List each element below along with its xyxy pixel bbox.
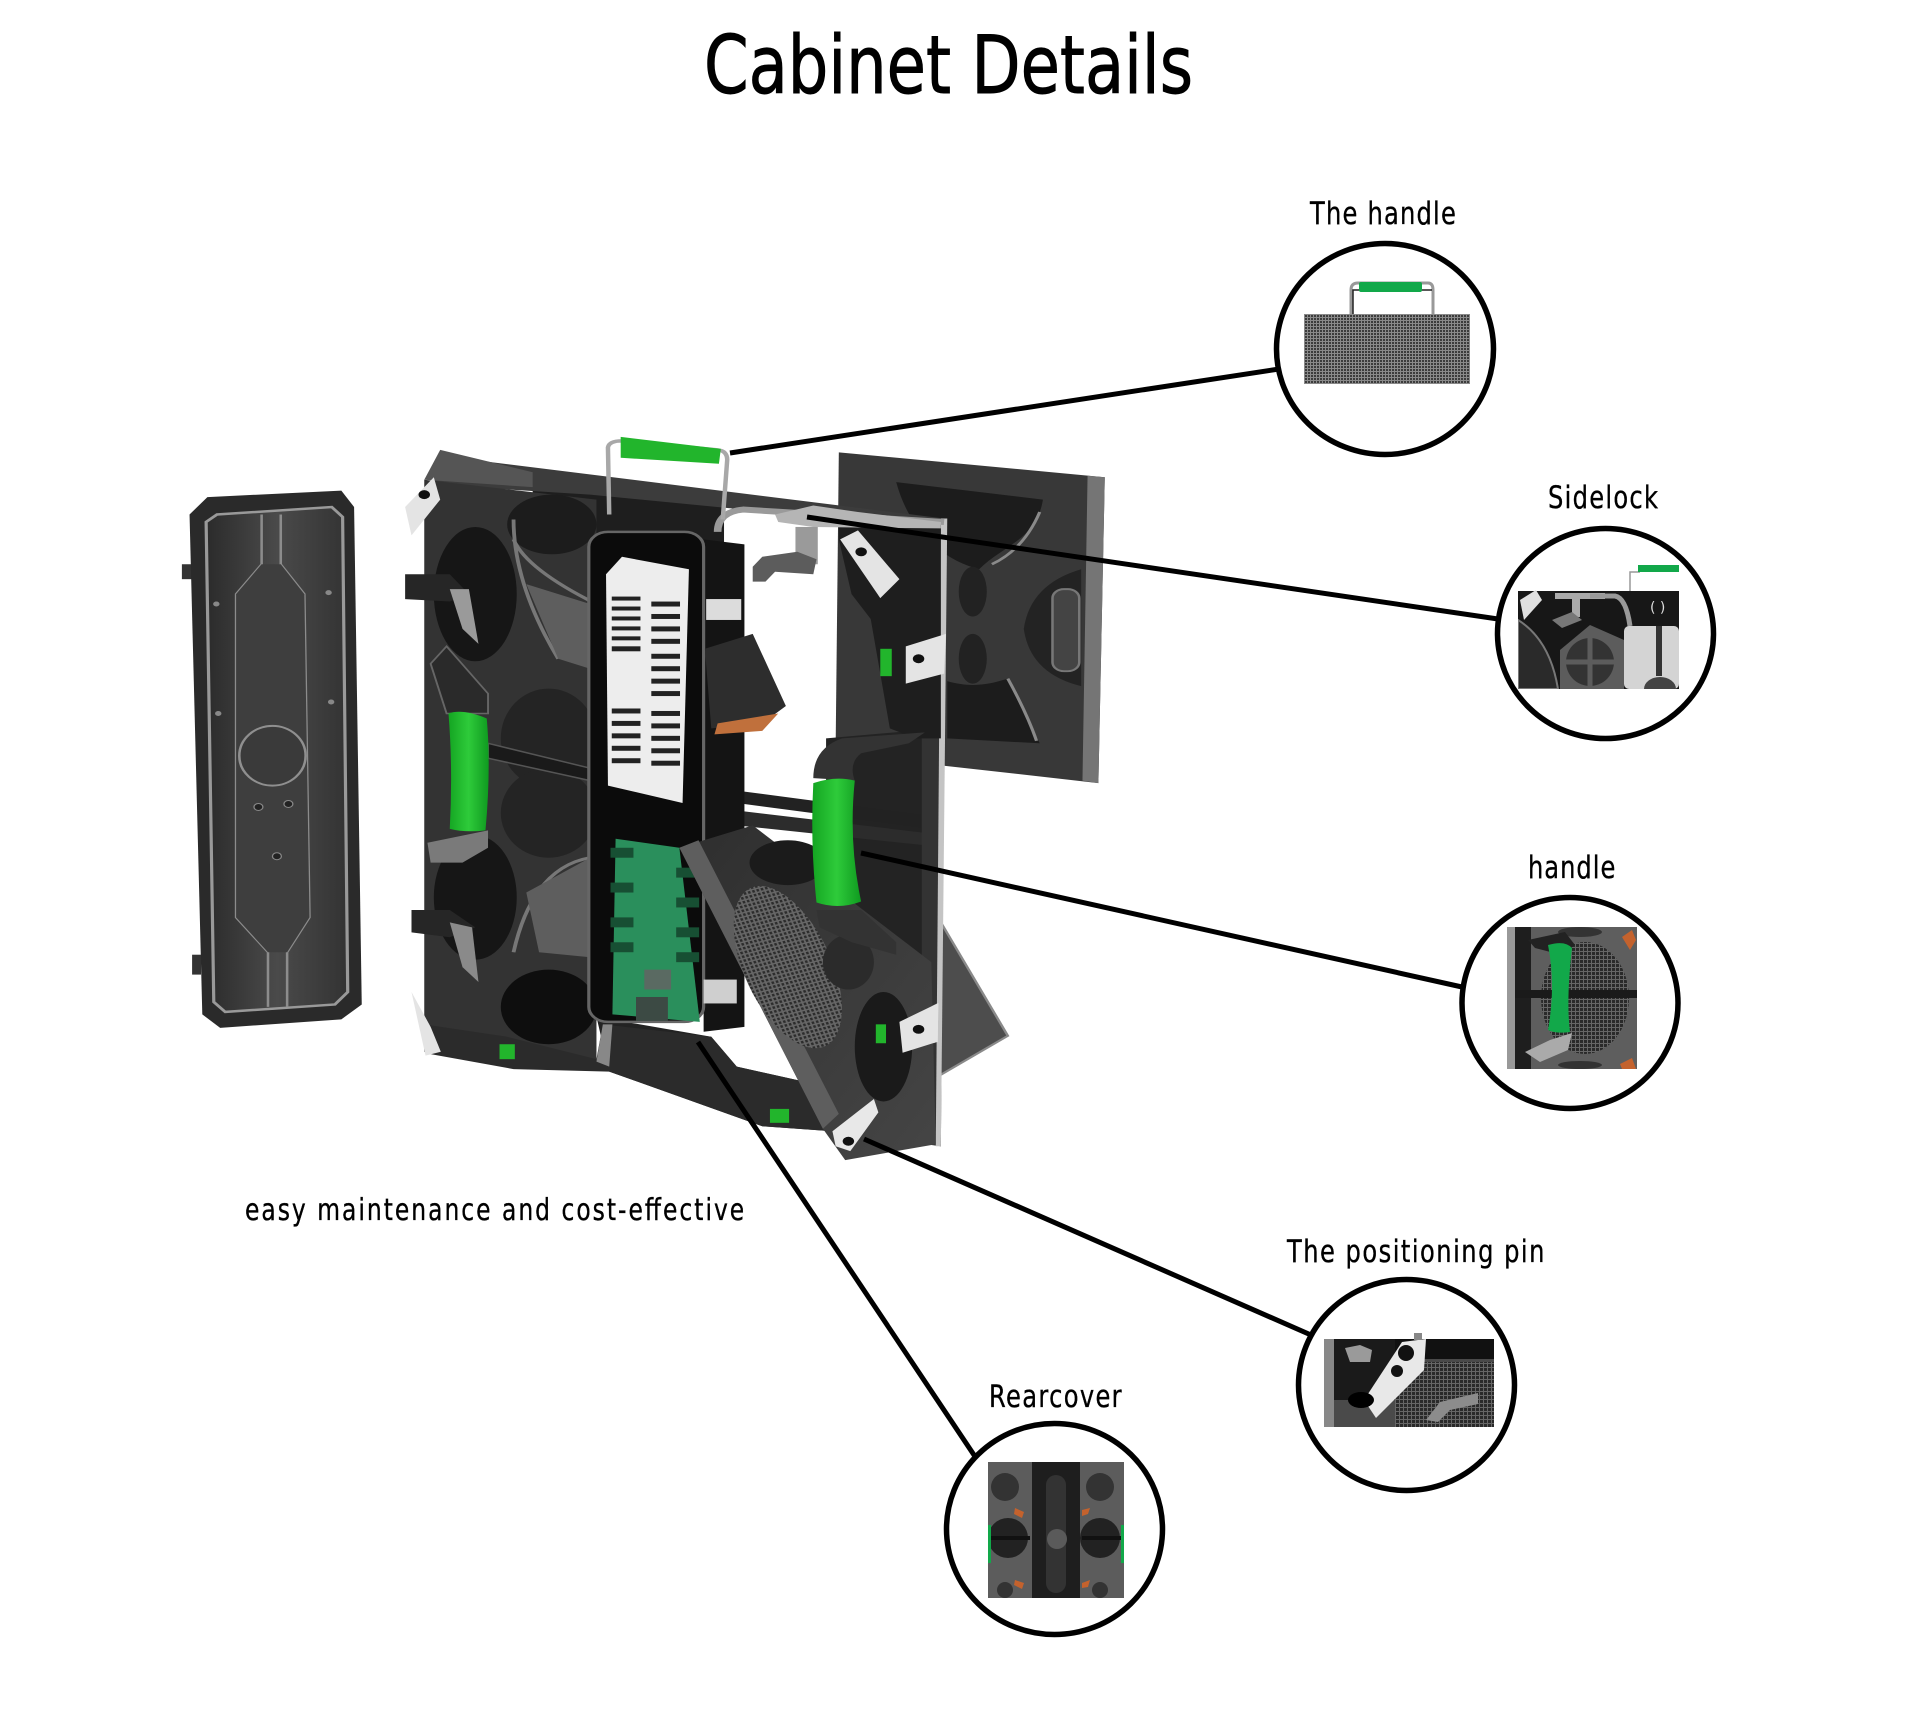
- thumbnail: handle detail: [1507, 927, 1637, 1069]
- right handle: [812, 649, 925, 955]
- callout: rear cover: [946, 1378, 1162, 1634]
- left handle: [427, 646, 489, 863]
- line: the handle: [730, 369, 1279, 453]
- right body rails and white gap: [714, 510, 947, 1146]
- cabinet exploded view: [182, 437, 1105, 1160]
- side lock: [753, 506, 941, 582]
- thumbnail: led module with handle: [1304, 282, 1470, 384]
- callout: handle: [1462, 849, 1678, 1108]
- title: Cabinet Details: [704, 19, 1193, 112]
- callout: sidelock: [1498, 479, 1714, 738]
- callout: the handle: The handle: [1309, 195, 1456, 232]
- cabinet left body: [405, 450, 944, 1131]
- callout: sidelock: Sidelock: [1548, 479, 1658, 516]
- line: rear cover: [698, 1042, 976, 1458]
- top carrying handle: [608, 437, 727, 519]
- circuit board: [610, 839, 700, 1022]
- callout: rear cover: Rearcover: [989, 1378, 1122, 1415]
- line: sidelock: [807, 517, 1498, 619]
- power supply: [606, 557, 689, 803]
- callout: the handle: [1276, 195, 1494, 454]
- callout: positioning pin: The positioning pin: [1286, 1233, 1544, 1270]
- central module: [589, 532, 786, 1032]
- corner brackets: [405, 477, 946, 1056]
- rear module panel: [836, 452, 1105, 783]
- thumbnail: rear cover detail: [988, 1462, 1124, 1598]
- callout: positioning pin: [1286, 1233, 1544, 1490]
- thumbnail: side lock detail: [1518, 565, 1679, 701]
- lower tilted module: [938, 922, 1008, 1077]
- thumbnail: positioning pin detail: [1324, 1333, 1494, 1427]
- tilted door: [679, 825, 938, 1160]
- top grille area: [533, 470, 724, 549]
- thumbnail: side lock detail: ( ): [1650, 600, 1665, 616]
- caption: easy maintenance and cost-effective: [245, 1193, 744, 1228]
- line: positioning pin: [864, 1139, 1311, 1335]
- leader lines: [698, 369, 1498, 1458]
- detached rear cover: [182, 491, 362, 1028]
- callout: handle: handle: [1528, 849, 1615, 886]
- line: handle: [861, 853, 1462, 987]
